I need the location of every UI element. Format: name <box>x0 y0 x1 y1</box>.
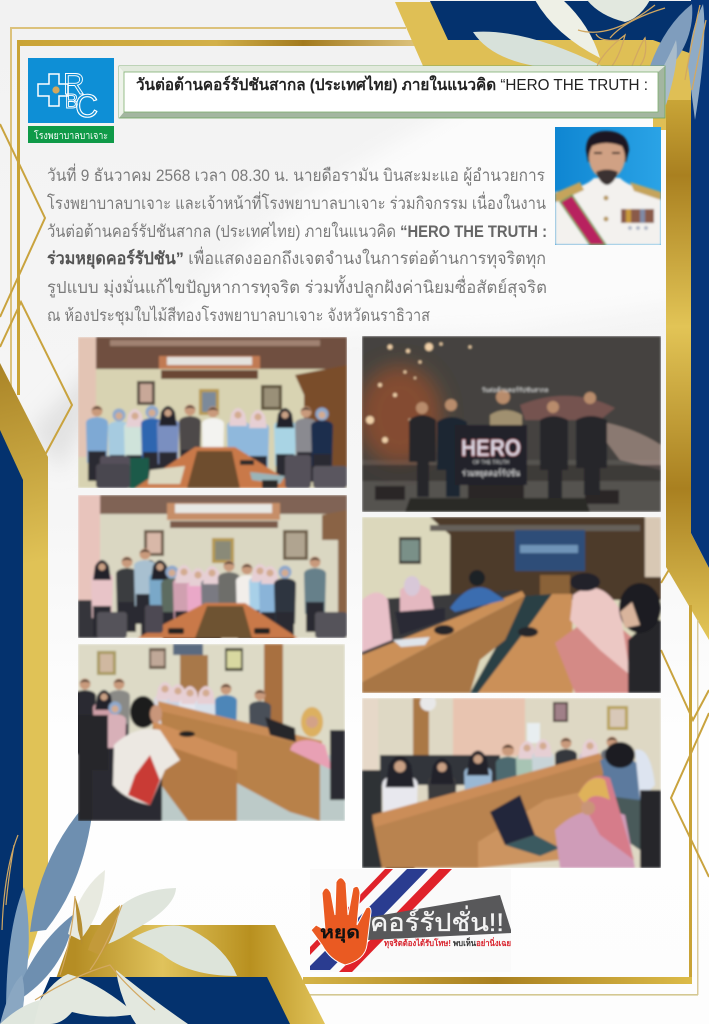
hand <box>311 878 371 965</box>
logo letter c: C <box>75 88 98 124</box>
grey sign <box>365 895 512 940</box>
top right leaves <box>473 0 706 120</box>
line 1: วันที่ 9 ธันวาคม 2568 เวลา 08.30 น. นายดือรามัน บินสะมะแอ ผู้อำนวยการ <box>47 163 545 186</box>
right lower gold lines <box>661 568 709 995</box>
gold zigzag lines left <box>0 124 72 455</box>
portrait photo <box>555 127 661 245</box>
photo: seated audience at wooden tables <box>74 644 345 821</box>
logo cross <box>38 74 68 106</box>
photo: HERO stage ceremony <box>358 336 661 512</box>
right gold band <box>666 100 709 640</box>
anti-corruption banner <box>310 869 512 972</box>
logo: โรงพยาบาลบาเจาะ <box>28 58 114 143</box>
photo: group standing in meeting room 1 <box>78 337 347 488</box>
photo: audience with laptop <box>362 695 661 877</box>
line 4: ร่วมหยุดคอร์รัปชัน” เพื่อแสดงออกถึงเจตจำนงในการต่อต้านการทุจริตทุก <box>47 246 546 269</box>
top right gold and navy corner <box>395 1 709 130</box>
title text: วันต่อต้านคอร์รัปชันสากล (ประเทศไทย) ภายในแนวคิด “HERO THE TRUTH : <box>136 75 648 94</box>
photo: HERO stage ceremony: OF THE TRUTH <box>473 460 510 466</box>
body paragraph <box>47 163 547 326</box>
logo caption: โรงพยาบาลบาเจาะ <box>34 129 108 142</box>
line 6: ณ ห้องประชุมใบไม้สีทองโรงพยาบาลบาเจาะ จังหวัดนราธิวาส <box>47 305 431 326</box>
bottom left gold and navy block <box>30 925 325 1024</box>
logo letters: R <box>63 68 85 101</box>
line 5: รูปแบบ มุ่งมั่นแก้ไขปัญหาการทุจริต ร่วมทั้งปลูกฝังค่านิยมซื่อสัตย์สุจริต <box>47 275 547 298</box>
right navy band <box>691 0 709 568</box>
podium text: HERO <box>461 435 521 462</box>
photo: audience watching projector <box>362 517 661 693</box>
bottom left leaves <box>0 806 237 1024</box>
top left gold frame lines <box>10 27 415 395</box>
photo: group standing in meeting room 2 <box>78 495 347 644</box>
bottom gold frame lines <box>303 977 698 996</box>
logo dot <box>52 86 60 94</box>
photo: HERO stage ceremony: ร่วมหยุดคอร์รัปชัน <box>462 467 520 479</box>
line 3: วันต่อต้านคอร์รัปชันสากล (ประเทศไทย) ภายในแนวคิด “HERO THE TRUTH : <box>47 221 547 241</box>
banner tagline: ทุจริตต้องได้รับโทษ! พบเห็นอย่านิ่งเฉย <box>384 936 511 949</box>
left gold and navy band <box>0 363 48 1024</box>
line 2: โรงพยาบาลบาเจาะ และเจ้าหน้าที่โรงพยาบาลบาเจาะ ร่วมกิจกรรม เนื่องในงาน <box>47 191 546 213</box>
logo letter b: B <box>65 91 78 113</box>
sign text: คอร์รัปชั่น!! <box>370 905 504 937</box>
flag stripes <box>310 869 452 972</box>
hand text: หยุด <box>320 923 360 943</box>
photo: HERO stage ceremony: วันต่อต้านคอร์รัปชันสากล <box>482 386 549 394</box>
title box <box>119 66 665 118</box>
